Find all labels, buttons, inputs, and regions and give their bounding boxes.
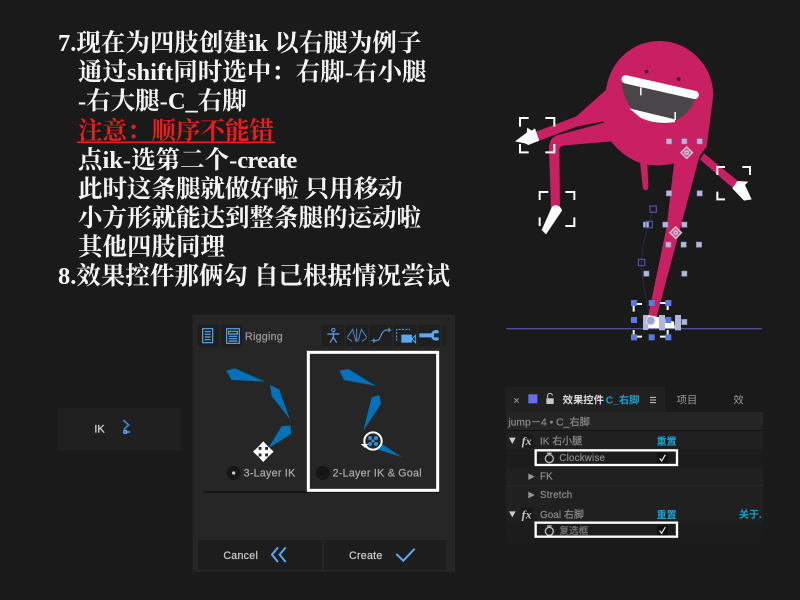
clockwise row [506, 449, 763, 467]
eyes [645, 70, 680, 81]
goal effect row [509, 507, 762, 521]
panel tabs: C_右脚 [606, 393, 640, 406]
effect controls panel [506, 387, 763, 541]
step 7 line 8: 其他四肢同理 [78, 233, 225, 261]
step 7 heading: 7.现在为四肢创建ik 以右腿为例子 [58, 29, 421, 57]
option label: 2-Layer IK & Goal [333, 468, 422, 480]
step 8: 8.效果控件那俩勾 自己根据情况尝试 [58, 262, 450, 290]
rotate cursor [361, 432, 382, 450]
option label: 3-Layer IK [244, 468, 295, 480]
step 7 line 6: 此时这条腿就做好啦 只用移动 [78, 175, 403, 203]
create button [324, 540, 446, 570]
IK effect row [509, 434, 677, 448]
IK label: IK [94, 423, 105, 435]
panel tabs: 效果控件 [563, 393, 604, 406]
layer breadcrumb [506, 412, 763, 431]
radio unselected [316, 466, 330, 480]
curve icon [371, 328, 391, 343]
notes icon [203, 329, 213, 343]
goal effect row: Goal 右脚 [540, 508, 584, 521]
rig control handles [643, 139, 702, 325]
checkbox row [506, 523, 763, 541]
character rig illustration [506, 41, 762, 340]
rigging label: Rigging [245, 331, 283, 343]
checkbox row: 复选框 [559, 525, 589, 537]
white highlight box [308, 352, 438, 490]
hands [515, 128, 752, 234]
clockwise row: Clockwise [559, 453, 605, 464]
cancel button [198, 540, 322, 570]
step 7 line 5: 点ik-选第二个-create [78, 145, 297, 174]
IK effect row: IK 右小腿 [540, 435, 582, 448]
Rigging panel [193, 315, 455, 572]
cancel button: Cancel [223, 550, 258, 562]
motion path handles [638, 206, 656, 266]
instruction text block [58, 29, 450, 290]
FK row: FK [540, 472, 553, 483]
panel tabs: 效 [733, 393, 744, 406]
fan icon [347, 329, 367, 342]
blue selection handles [631, 300, 671, 340]
goal effect row: 关于. [739, 508, 762, 521]
IK effect row: 重置 [657, 435, 677, 448]
3-layer IK option [226, 368, 295, 480]
IK chain icon [123, 420, 130, 433]
panel tabs: 项目 [677, 394, 697, 406]
ground line [506, 328, 762, 329]
2-layer IK option [316, 369, 422, 480]
move cursor [253, 441, 274, 462]
rotation anchors [670, 147, 692, 238]
FK row [528, 472, 553, 483]
panel tabs [514, 393, 744, 406]
divider [203, 491, 440, 493]
camera icon [397, 329, 415, 343]
motion path [641, 209, 653, 310]
step 7 line 3: -右大腿-C_右脚 [78, 87, 247, 115]
stretch row [506, 485, 763, 501]
goal effect row: fx [522, 507, 532, 521]
step 7 line 2: 通过shift同时选中：右脚-右小腿 [78, 58, 427, 86]
step 7 line 7: 小方形就能达到整条腿的运动啦 [78, 204, 421, 232]
pink body and limbs [536, 41, 739, 317]
IK button [57, 407, 181, 450]
figure icon [327, 333, 339, 343]
calculator icon [227, 329, 239, 343]
toolbar [197, 325, 447, 347]
IK effect row: fx [522, 434, 532, 448]
radio selected [227, 466, 241, 480]
red warning: 注意：顺序不能错 [78, 116, 274, 145]
goal effect row: 重置 [657, 508, 677, 521]
create button: Create [349, 550, 383, 562]
mouth [622, 79, 697, 124]
foot with selected controls [643, 315, 681, 330]
layer breadcrumb: jump－4 • C_右脚 [507, 416, 590, 429]
wrench icon [419, 330, 439, 341]
selection brackets [520, 118, 750, 337]
stretch row: Stretch [540, 490, 572, 501]
